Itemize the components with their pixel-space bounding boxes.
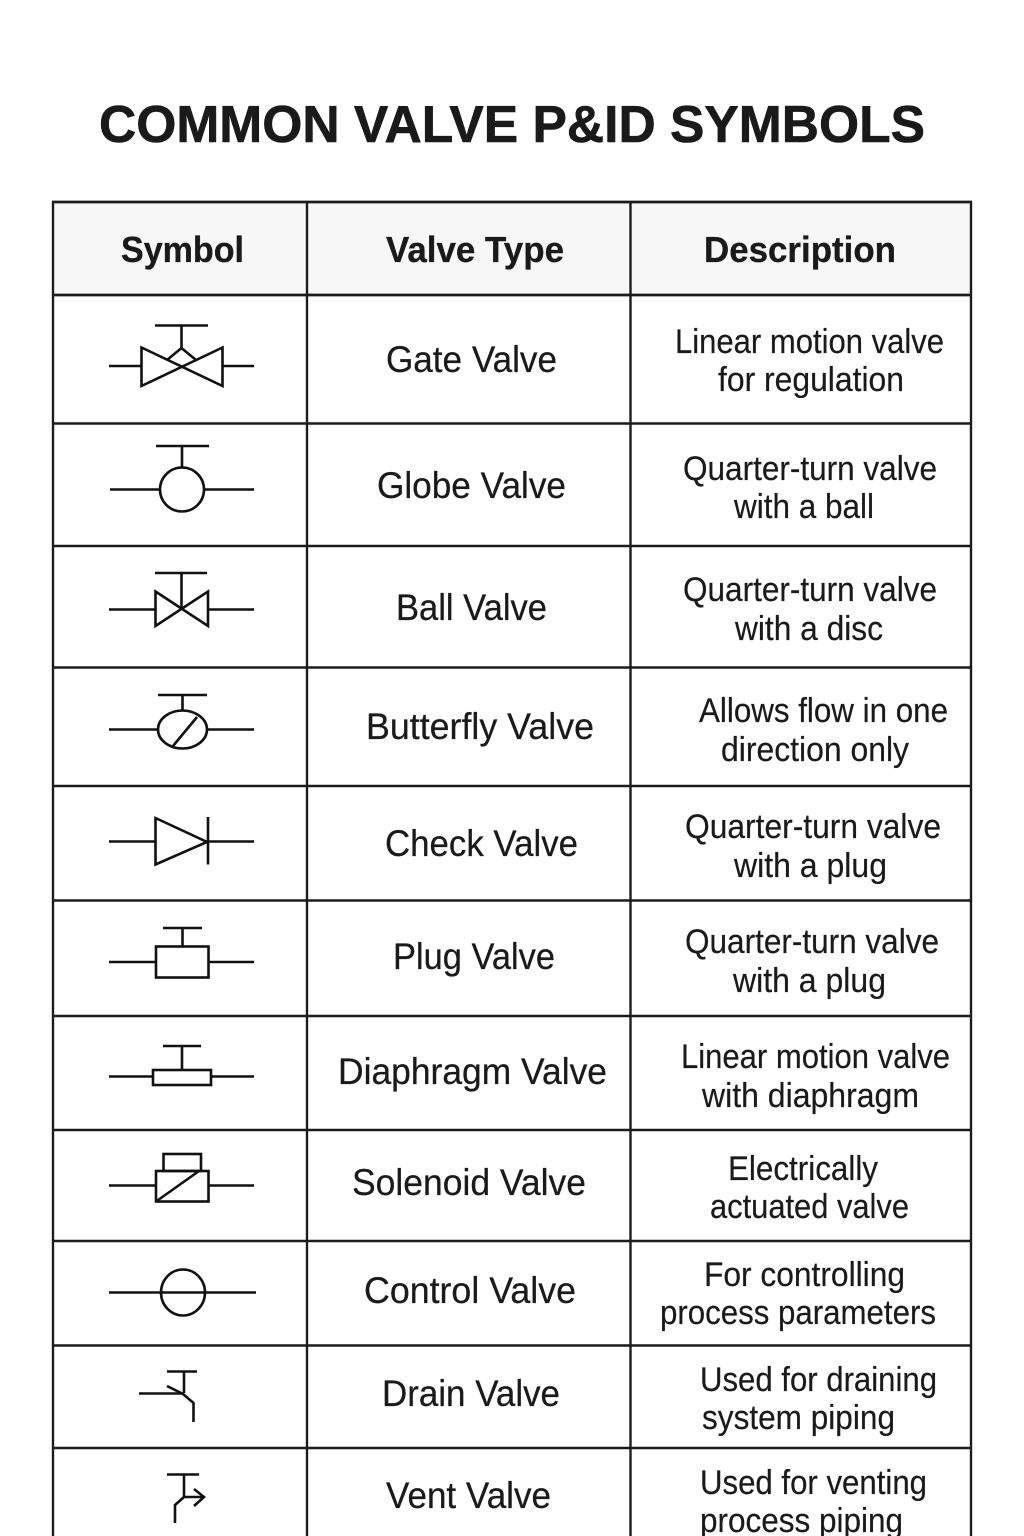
type: globe valve: Globe Valve [377, 465, 566, 506]
description: butterfly valve: Allows flow in one [699, 692, 948, 730]
description: globe valve: with a ball [733, 488, 874, 526]
type: diaphragm valve: Diaphragm Valve [338, 1051, 607, 1092]
icon: gate valve symbol [109, 326, 254, 386]
description: gate valve [675, 323, 944, 399]
description: ball valve: with a disc [734, 610, 883, 648]
type: vent valve: Vent Valve [386, 1475, 551, 1516]
icon: vent valve symbol [167, 1474, 204, 1523]
description: drain valve: Used for draining [700, 1361, 937, 1399]
header: symbol: Symbol [121, 229, 244, 270]
description: control valve [660, 1256, 936, 1332]
description: butterfly valve [699, 692, 948, 769]
description: gate valve: Linear motion valve [675, 323, 944, 361]
row: control valve [109, 1256, 936, 1332]
description: gate valve: for regulation [718, 361, 904, 399]
table [52, 201, 972, 1536]
description: drain valve: system piping [702, 1399, 895, 1437]
row: ball valve [109, 571, 937, 648]
row: plug valve [109, 923, 939, 1000]
row: butterfly valve [109, 692, 948, 769]
header row [53, 202, 971, 295]
icon: control valve symbol [109, 1270, 256, 1316]
description: plug valve: with a plug [732, 962, 886, 1000]
description: check valve [685, 808, 941, 885]
row: diaphragm valve [109, 1038, 950, 1115]
description: control valve: process parameters [660, 1294, 936, 1332]
description: plug valve: Quarter-turn valve [685, 923, 939, 961]
description: solenoid valve [710, 1150, 909, 1226]
type: control valve: Control Valve [364, 1270, 576, 1311]
description: solenoid valve: Electrically [728, 1150, 878, 1188]
icon: diaphragm valve symbol [109, 1046, 254, 1085]
description: globe valve: Quarter-turn valve [683, 450, 937, 488]
description: solenoid valve: actuated valve [710, 1188, 909, 1226]
description: globe valve [683, 450, 937, 526]
row: gate valve [109, 323, 944, 399]
type: solenoid valve: Solenoid Valve [352, 1162, 586, 1203]
icon: check valve symbol [109, 817, 254, 864]
header: description: Description [704, 229, 896, 270]
icon: drain valve symbol [139, 1372, 197, 1422]
title: COMMON VALVE P&ID SYMBOLS [99, 96, 925, 154]
icon: solenoid valve symbol [109, 1154, 254, 1202]
header: valve type: Valve Type [386, 229, 564, 270]
description: diaphragm valve: with diaphragm [701, 1077, 919, 1115]
row: globe valve [110, 446, 937, 526]
icon: butterfly valve symbol [109, 695, 254, 748]
row: vent valve [167, 1464, 927, 1536]
type: plug valve: Plug Valve [393, 936, 555, 977]
type: drain valve: Drain Valve [382, 1373, 560, 1414]
description: plug valve [685, 923, 939, 1000]
description: diaphragm valve: Linear motion valve [681, 1038, 950, 1076]
type: ball valve: Ball Valve [396, 587, 547, 628]
description: check valve: Quarter-turn valve [685, 808, 941, 846]
description: check valve: with a plug [733, 847, 887, 885]
type: check valve: Check Valve [385, 823, 578, 864]
row: drain valve [139, 1361, 937, 1437]
icon: ball valve symbol [109, 573, 254, 626]
description: control valve: For controlling [704, 1256, 905, 1294]
row: check valve [109, 808, 941, 885]
type: gate valve: Gate Valve [386, 339, 557, 380]
description: ball valve: Quarter-turn valve [683, 571, 937, 609]
description: vent valve [700, 1464, 927, 1536]
description: diaphragm valve [681, 1038, 950, 1115]
icon: plug valve symbol [109, 928, 254, 978]
row: solenoid valve [109, 1150, 909, 1226]
description: butterfly valve: direction only [721, 731, 909, 769]
icon: globe valve symbol [110, 446, 254, 512]
description: drain valve [700, 1361, 937, 1437]
description: vent valve: Used for venting [700, 1464, 927, 1502]
type: butterfly valve: Butterfly Valve [366, 706, 594, 747]
description: ball valve [683, 571, 937, 648]
